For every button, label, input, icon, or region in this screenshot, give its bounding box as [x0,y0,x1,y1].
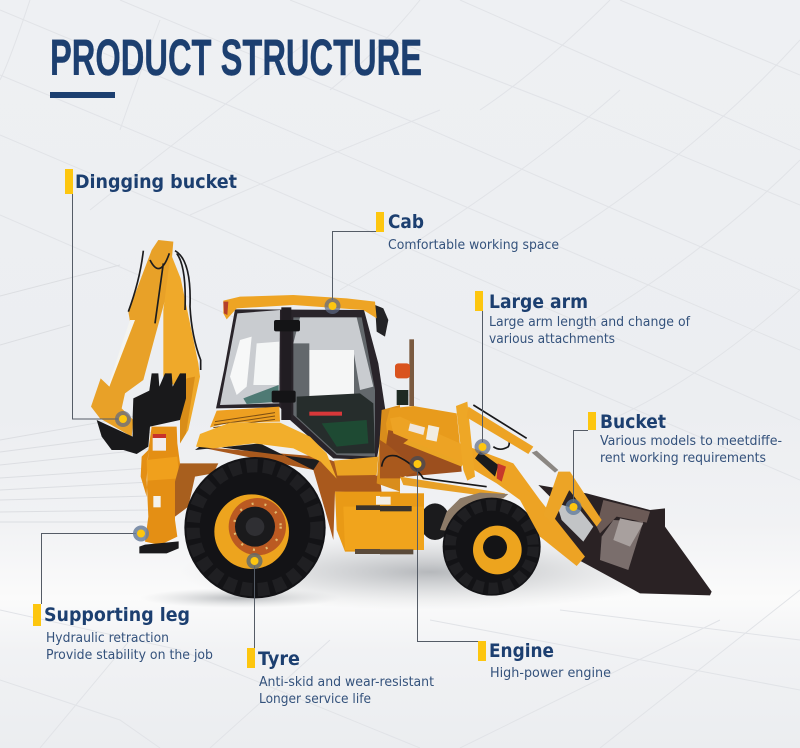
callout: Large arm: various attachments [489,332,615,347]
hydraulic hoses [382,405,527,487]
front chassis bar [400,477,505,498]
callout: Engine: High-power engine [490,666,611,681]
front fender [440,493,508,531]
engine box right [380,493,424,550]
callout: Dingging bucket: Dingging bucket [75,171,237,193]
roof [223,295,377,319]
engine side [377,405,400,492]
callout: Cab: Cab [388,211,424,233]
callout: Cab [324,211,559,314]
boom [163,253,200,443]
main lift arm [390,417,585,566]
loader bucket [538,485,712,595]
callout: Large arm: Large arm length and change of [489,315,690,330]
callout: Supporting leg [33,526,213,663]
dipper arm [91,240,173,437]
rear tyre [184,457,326,598]
bucket link [543,472,602,527]
ground shadow [140,534,680,610]
title underline [50,92,115,98]
callout: Engine: Engine [489,640,554,662]
callout: Tyre: Longer service life [259,692,371,707]
hood and vent [210,407,280,427]
callout: Bucket: rent working requirements [600,451,766,466]
chassis [197,447,382,540]
backhoe loader illustration [91,240,712,598]
rear-side tyre shadow [420,503,450,540]
title: PRODUCT STRUCTURE [50,29,422,86]
callout: Bucket: Various models to meetdiffe- [600,434,782,449]
exhaust and beacon [409,339,414,406]
front tyre [443,498,541,596]
cab windows [220,310,280,405]
vertical link [456,402,475,481]
mirror [375,305,388,337]
hydraulic hoses [128,251,201,370]
callout: Dingging bucket [65,169,237,427]
callout: Bucket [566,411,782,515]
front loader [380,339,712,596]
callout: Bucket: Bucket [600,411,666,433]
rear fender [196,423,337,479]
step panel [334,457,378,476]
callout: Tyre: Anti-skid and wear-resistant [259,675,434,690]
callout: Large arm: Large arm [489,291,588,313]
callout: Supporting leg: Supporting leg [44,604,190,626]
callout: Tyre: Tyre [258,648,300,670]
callout: Engine [410,456,611,681]
callout: Supporting leg: Hydraulic retraction [46,631,169,646]
callout: Tyre [246,553,434,707]
cab frame [216,309,385,460]
lower arm [403,438,467,467]
callout: Large arm [474,291,690,455]
upper link [467,407,533,454]
rear backhoe and cab [91,240,400,598]
stabilizer leg [141,427,181,545]
rear bucket [97,373,186,454]
callout: Cab: Comfortable working space [388,238,559,253]
warning labels [408,423,425,435]
chassis red [383,430,462,477]
hood [386,406,460,467]
callout: Supporting leg: Provide stability on the job [46,648,213,663]
